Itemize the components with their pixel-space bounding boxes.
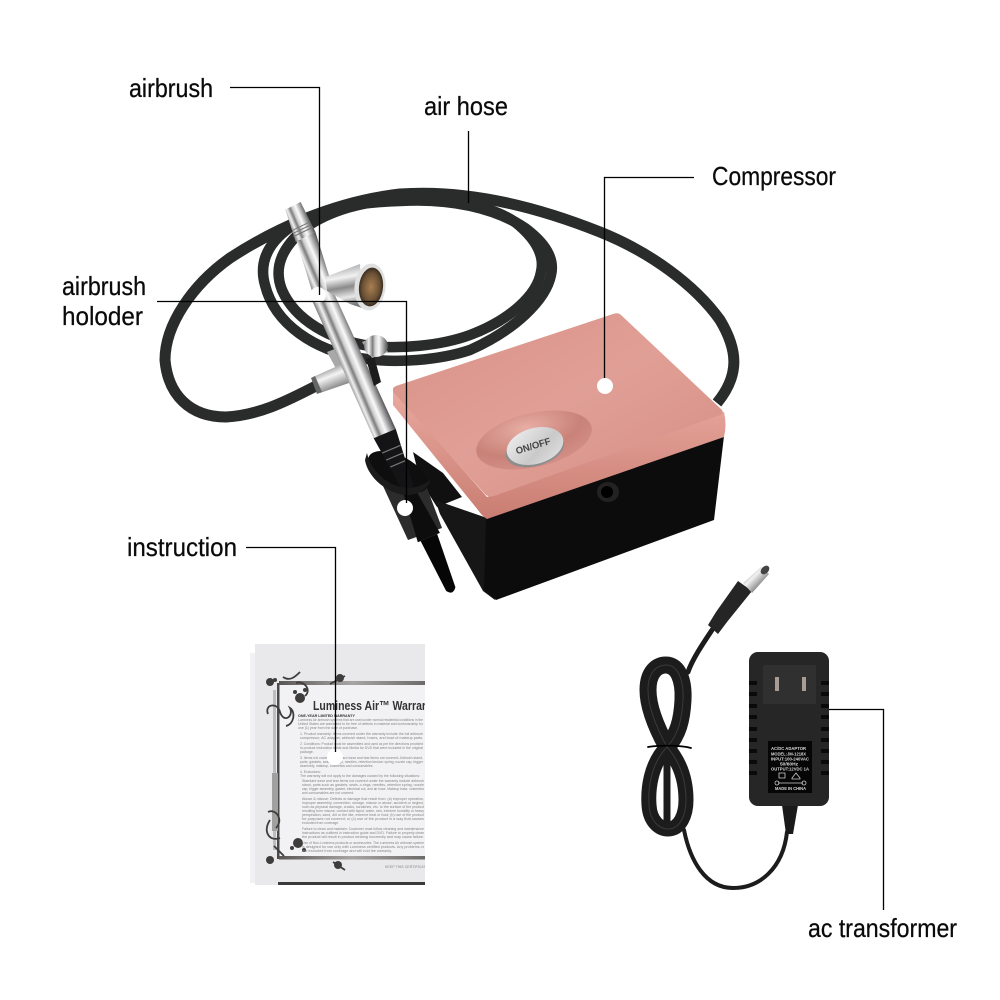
warranty body text: 4. Exclusions:: [300, 770, 321, 774]
rating label: OUTPUT:12VDC 1A: [771, 766, 810, 772]
rating label: MODEL:JM-1218X: [771, 752, 807, 756]
power button recess: [470, 400, 598, 480]
trigger lever: [362, 335, 388, 358]
warranty body text: stand, parts such as gaskets, seals, o-rings, needles, retention spring, nozzle: [302, 783, 424, 787]
rating label: AC/DC ADAPTOR: [771, 746, 807, 751]
warranty heading: Luminess Air™ Warrar: [313, 698, 426, 713]
rating label: [768, 741, 812, 793]
decorative border: [266, 672, 425, 870]
holder ring front: [365, 453, 430, 495]
pink lid top: [393, 313, 723, 497]
ON/OFF button: ON/OFF: [514, 436, 552, 457]
warranty body text: KEEP THIS CERTIFICATE: [385, 865, 429, 869]
holder ring back: [361, 442, 435, 502]
compressor: [393, 313, 726, 600]
warranty body text: for purposes not covered; or (c) use of the product in a way that causes: [302, 817, 424, 821]
ac transformer: [648, 564, 829, 888]
warranty body text: resulting from misuse, contact with liquid, water, rain, extreme humidity or heavy: [302, 809, 424, 813]
main barrel: [310, 286, 396, 439]
barrel assembly: [275, 201, 466, 598]
back sheet: [250, 653, 260, 883]
label: Compressor: Compressor: [712, 161, 836, 191]
black nozzle cone: [374, 429, 419, 493]
black stem: [397, 484, 440, 542]
warranty body text: 2. Conditions: Product must be assembled and used as per the directions provided: [300, 742, 423, 746]
warranty body text: The warranty will not apply to the damages caused by the following situations:: [300, 774, 420, 778]
warranty body text: excluded from coverage.: [302, 821, 339, 825]
warranty body text: compressor, AC adapter, airbrush stand, hoses, and bowl of makeup parts.: [300, 736, 423, 740]
warranty body text: United States are warranted to be free of defects in material and workmanship for: [298, 722, 424, 726]
ON/OFF button: [501, 421, 569, 474]
warranty body text: the product will result in product wearing incorrectly and may cause failure.: [302, 835, 424, 839]
airbrush: [275, 201, 466, 598]
power cord with coil: [648, 630, 787, 888]
label: ac transformer: ac transformer: [808, 913, 957, 943]
warranty body text: [298, 714, 429, 869]
warranty body text: instructions as outlined in instruction guide and DVD. Failure to properly clean: [302, 831, 424, 835]
rating label: INPUT:100-240VAC: [771, 756, 810, 762]
warranty body text: improper assembly, connection, storage, misuse or abuse, accident or neglect,: [302, 801, 424, 805]
warranty body text: package.: [300, 750, 314, 754]
front sheet: [255, 644, 425, 885]
instruction sheet: [250, 644, 429, 885]
warranty body text: and consumables are not covered.: [302, 791, 354, 795]
warranty body text: cap, trigger assembly, gasket, electrical cut, and air hose. Makeup base, cosmetics: [302, 787, 424, 791]
pink lid front and side lip: [393, 390, 726, 519]
printed page: [266, 672, 429, 885]
label: airbrush holder: [62, 271, 146, 331]
air hose: [165, 193, 734, 417]
trigger slot: [366, 356, 381, 386]
warranty body text: is designed for use only with Luminess certified products. Any problems or: [302, 845, 425, 849]
warranty body text: Abuse & misuse: Defects or damage that result from: (a) improper operation,: [302, 797, 424, 801]
label: airbrush holder: holoder: [62, 301, 143, 331]
label: airbrush holder: airbrush: [62, 271, 146, 301]
vent slots: [749, 681, 829, 775]
warranty body text: Standard wear and tear items not covered under the warranty include airbrush: [302, 779, 424, 783]
warranty body text: parts, gaskets, seals, o-rings, needles, retention tension spring, nozzle cap, trigger: [300, 760, 424, 764]
dark edge strip: [278, 882, 428, 885]
warranty body text: perspiration, sand, dirt or the like, extreme heat or food; (b) use of the product: [302, 813, 424, 817]
DC plug: [708, 564, 771, 634]
label: airbrush: airbrush: [129, 73, 213, 103]
warranty body text: 3. Items not covered: Standard wear and tear items not covered: Airbrush stand,: [300, 756, 423, 760]
warranty body text: Luminess Air airbrush systems that are used under normal residential conditions in the: [298, 718, 423, 722]
label: air hose: air hose: [424, 91, 508, 121]
warranty body text: Use of Non-Luminess products or accessories: The Luminess Air airbrush system: [302, 841, 424, 845]
black base: [484, 436, 724, 600]
paint cup: [325, 262, 388, 312]
cone rings: [382, 445, 407, 468]
holder lower body: [383, 486, 442, 540]
warranty body text: ONE-YEAR LIMITED WARRANTY: [298, 714, 356, 718]
warranty body text: are excluded from coverage and will void the warranty.: [302, 849, 392, 853]
power jack: [597, 482, 619, 502]
left side of base: [435, 500, 495, 600]
warranty body text: in product instruction guide and Media for DVD that were included in the original: [300, 746, 423, 750]
warranty body text: assembly, makeup, cosmetics and consumables.: [300, 764, 373, 768]
needle cap: [282, 201, 316, 242]
label: instruction: instruction: [127, 532, 237, 562]
plug recess and prongs: [763, 665, 816, 704]
strain relief: [782, 805, 798, 834]
adapter body: [749, 652, 829, 806]
air inlet connector: [311, 345, 352, 394]
cap ribbing: [291, 221, 314, 237]
warranty body text: one (1) year from the date of purchase.: [298, 726, 358, 730]
rear tube: [290, 232, 339, 297]
callout dots: [310, 287, 613, 765]
warranty body text: 1. Product warranty: Items covered under the warranty include the full airbrush: [300, 732, 423, 736]
callout leader lines: [157, 88, 884, 910]
holder bracket: [413, 452, 462, 507]
warranty body text: Failure to clean and maintain: Customer must follow cleaning and maintenance: [302, 827, 424, 831]
warranty body text: such as physical damage, cracks, scratches, etc. to the surface of the product: [302, 805, 424, 809]
rating label: 50/60Hz: [780, 762, 799, 766]
nozzle tip: [421, 534, 460, 596]
rating label: MADE IN CHINA: [775, 786, 807, 791]
